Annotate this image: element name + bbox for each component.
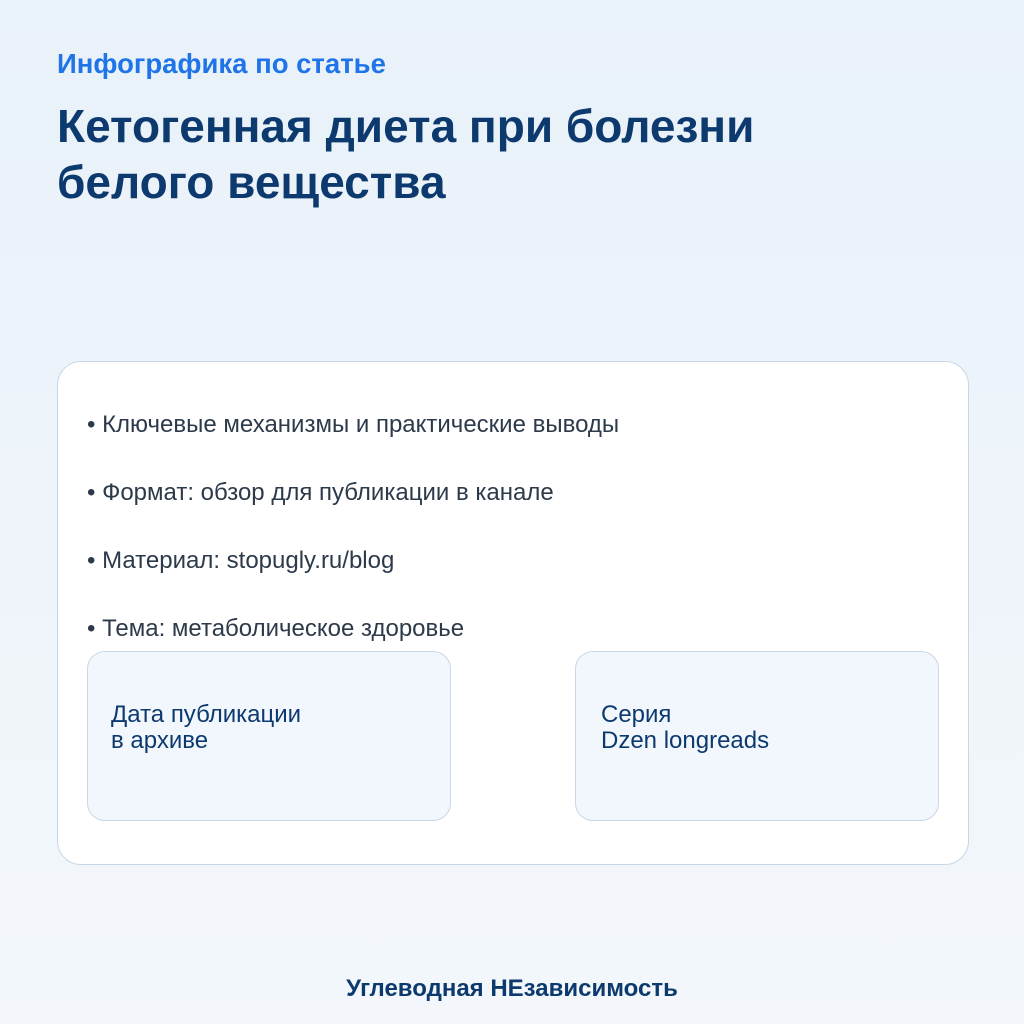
box: series [575,651,939,821]
panel: main card [57,361,969,865]
box: date [87,651,451,821]
footer: Углеводная НЕзависимость [346,975,678,1002]
subtitle: Инфографика по статье [57,48,386,79]
title: Кетогенная диета при болезни [57,100,754,152]
title [57,100,754,208]
bullet list [87,411,619,642]
bullet list: • Материал: stopugly.ru/blog [87,547,394,574]
bullet list: • Ключевые механизмы и практические выводы [87,411,619,438]
box: series: Серия [601,701,671,728]
bullet list: • Формат: обзор для публикации в канале [87,479,554,506]
box: date: в архиве [111,727,208,754]
box: date: Дата публикации [111,701,301,728]
bullet list: • Тема: метаболическое здоровье [87,615,464,642]
title: белого вещества [57,156,446,208]
box: series: Dzen longreads [601,727,769,754]
